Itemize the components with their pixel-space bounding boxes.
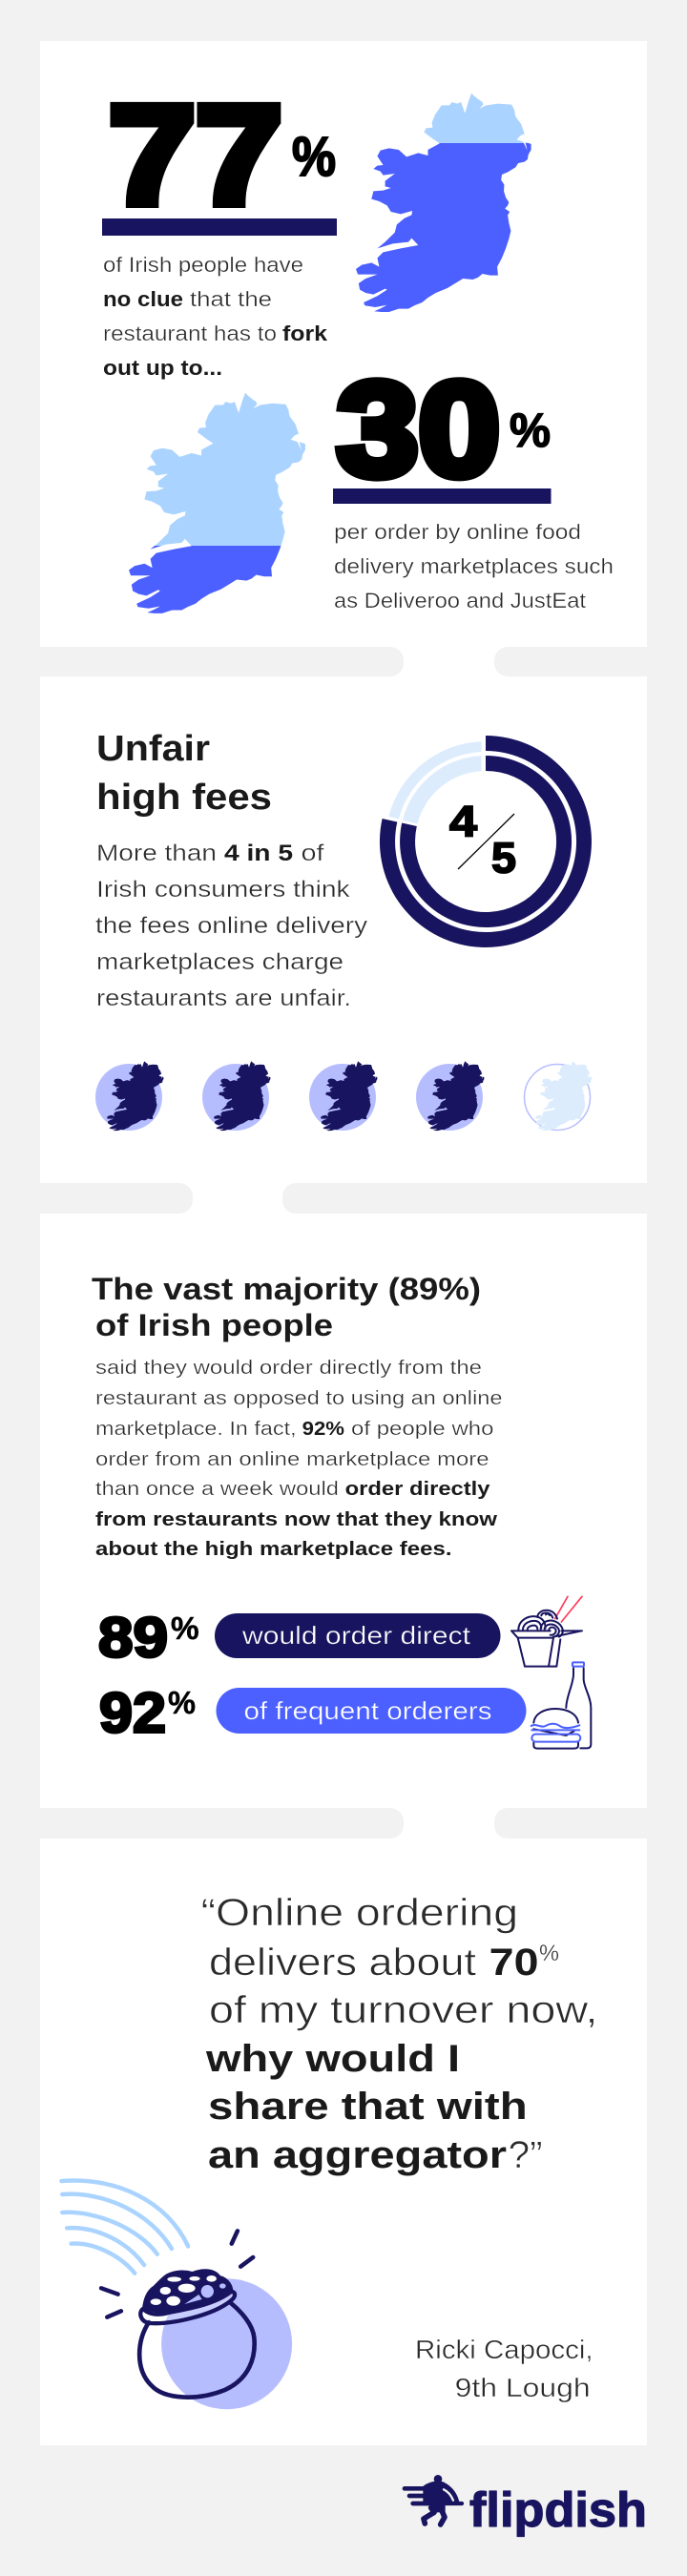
icon: burger and bottle [531,1662,591,1749]
icon: pot of gold [61,2181,292,2409]
panel: 77 percent and 30 percent [40,41,647,647]
text: more than 4 in 5: Irish consumers think [96,877,351,903]
text: more than 4 in 5: the fees online delivery [95,913,367,939]
quote: online ordering: of my turnover now, [209,1989,597,2031]
logo: flipdish: flipdish [469,2483,647,2537]
text: order directly paragraph: 92% [302,1419,344,1440]
text: order directly paragraph: marketplace. In fact, [95,1419,297,1440]
icon: noodle box [511,1596,582,1667]
quote: online ordering: “Online ordering [201,1892,518,1934]
icon: Ireland 4 [416,1061,484,1131]
stat: 30% [337,354,551,504]
quote: online ordering [201,1892,597,2176]
text: more than 4 in 5: marketplaces charge [96,949,344,975]
text: order directly paragraph: about the high marketplace fees. [95,1539,452,1560]
stat: 92%: % [168,1685,196,1720]
attribution: Ricki Capocci: 9th Lough [455,2373,591,2402]
chart: 4 of 5 donut: 5 [491,834,516,882]
bar under 77% [102,218,337,236]
text: of Irish people have no clue: restaurant has to [103,322,277,345]
text: per order by online food delivery marketplaces: delivery marketplaces such [334,554,614,578]
icon: Ireland 1 [95,1061,163,1131]
stat: 30%: 30 [337,354,500,504]
text: of Irish people have no clue: no clue [103,287,183,311]
icon: Ireland 2 [202,1061,270,1131]
text: order directly paragraph: said they would order directly from the [95,1358,482,1379]
quote: online ordering: 70 [489,1942,538,1984]
attribution: Ricki Capocci: Ricki Capocci, [415,2335,593,2364]
pill: would order direct: would order direct [241,1621,471,1650]
text: of Irish people have no clue: out up to... [103,356,222,380]
text: more than 4 in 5: More than [96,841,217,866]
chart: 4 of 5 donut [380,736,592,947]
quote: online ordering: share that with [208,2086,528,2128]
heading: Unfair high fees: Unfair [96,729,210,769]
text: order directly paragraph: than once a week would [95,1479,339,1500]
text: order directly paragraph: of people who [351,1419,494,1440]
text: of Irish people have no clue [103,253,328,380]
quote: online ordering: ?” [509,2134,543,2176]
stat: 89%: % [171,1610,199,1646]
icon: Ireland 5 light [525,1061,592,1131]
map: Ireland 30% shaded [129,393,305,613]
pill: of frequent orderers: of frequent orderers [244,1696,492,1725]
stat: 89%: 89 [98,1607,168,1670]
text: per order by online food delivery marketplaces: as Deliveroo and JustEat [334,589,586,613]
attribution: Ricki Capocci [415,2335,593,2402]
stat: 77% [109,77,336,234]
pill: of frequent orderers [216,1688,527,1734]
heading: the vast majority [92,1272,481,1342]
text: of Irish people have no clue: fork [282,322,328,345]
text: order directly paragraph: from restaurants now that they know [95,1509,498,1530]
heading: Unfair high fees: high fees [96,778,272,818]
quote: online ordering: an aggregator [208,2134,507,2176]
text: order directly paragraph: order directly [345,1479,491,1500]
text: per order by online food delivery marketplaces: per order by online food [334,520,581,544]
map: Ireland 77% shaded [356,93,531,312]
text: order directly paragraph: order from an online marketplace more [95,1449,489,1470]
text: of Irish people have no clue: of Irish people have [103,253,303,277]
stat: 89% [98,1607,199,1670]
icon: flipdish runner [405,2475,462,2524]
quote: online ordering: why would I [205,2038,460,2080]
icon: Ireland 3 [309,1061,377,1131]
text: of Irish people have no clue: that the [190,287,272,311]
text: more than 4 in 5: of [302,841,324,866]
text: more than 4 in 5: restaurants are unfair. [96,986,351,1011]
quote: online ordering: % [539,1941,559,1966]
heading: Unfair high fees [96,729,272,818]
stat: 92%: 92 [99,1681,166,1744]
stat: 92% [99,1681,196,1744]
panel: unfair high fees [40,676,647,1183]
icons: row of five Ireland people [95,1061,592,1131]
stat: 30%: % [510,404,551,457]
stat: 77%: % [292,126,336,188]
heading: the vast majority: The vast majority (89%) [92,1272,481,1306]
quote: online ordering: delivers about [209,1942,476,1984]
panel: quote [40,1839,647,2445]
chart: 4 of 5 donut: 4 [449,798,477,845]
panel: vast majority [40,1214,647,1808]
logo: flipdish [405,2475,647,2537]
text: per order by online food delivery marketplaces [334,520,614,613]
heading: the vast majority: of Irish people [95,1308,333,1342]
text: more than 4 in 5: 4 in 5 [224,841,293,866]
text: more than 4 in 5 [95,841,367,1011]
text: order directly paragraph: restaurant as opposed to using an online [95,1388,502,1409]
stat: 77%: 77 [109,77,282,234]
pill: would order direct [215,1613,500,1658]
bar under 30% [333,488,552,504]
text: order directly paragraph [95,1358,502,1560]
